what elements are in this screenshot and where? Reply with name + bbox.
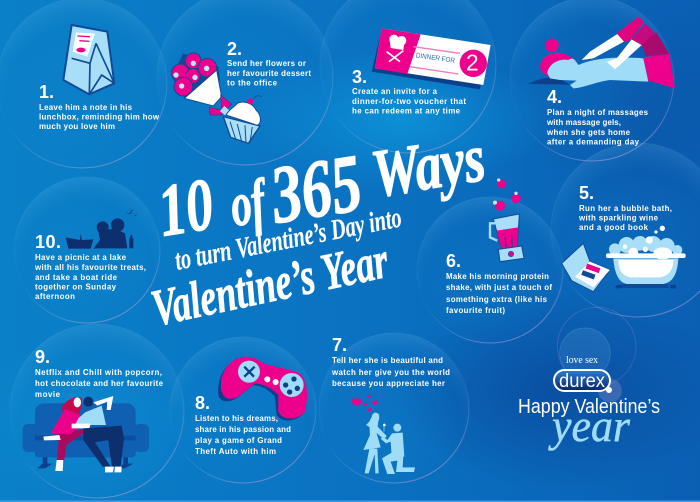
text: item 6: 6. <box>446 251 461 271</box>
text: item 7: Tell her she is beautiful and <box>332 356 443 365</box>
icon: blender and strawberries <box>490 178 524 262</box>
text: item 1: Leave him a note in his <box>39 103 133 112</box>
text: item 7 <box>331 335 450 388</box>
item 10: picnic <box>34 209 146 301</box>
text: item 5 <box>578 183 672 232</box>
durex logo lockup <box>518 307 660 451</box>
item 6: protein shake <box>446 178 552 315</box>
icon: massage illustration <box>528 17 675 88</box>
text: item 2: Send her flowers or <box>227 59 306 68</box>
text: item 1: 1. <box>39 82 54 102</box>
title: Valentine’s Year <box>147 232 394 338</box>
text: item 4: Plan a night of massages <box>547 108 649 117</box>
text: item 10: 10. <box>35 232 61 252</box>
title: 365 <box>264 137 368 241</box>
text: item 7: watch her give you the world <box>331 368 450 377</box>
text: item 5: and a good book <box>579 223 649 232</box>
durex pill: durex <box>559 371 605 392</box>
item 4: massage <box>528 17 675 146</box>
text: item 1: lunchbox, reminding him how <box>39 112 160 122</box>
text: item 9: movie <box>35 390 61 399</box>
icon: dinner for 2 ticket <box>372 28 491 89</box>
text: item 9: 9. <box>35 347 50 367</box>
text: item 6 <box>446 251 552 315</box>
text: item 3 <box>352 67 466 116</box>
text: item 8 <box>195 393 291 456</box>
text: item 9: hot chocolate and her favourite <box>35 379 164 388</box>
text: item 1: much you love him <box>39 122 115 131</box>
icon: lunch bag <box>63 25 114 94</box>
text: item 8: share in his passion and <box>195 425 291 434</box>
icon: couple on sofa <box>23 396 149 472</box>
title <box>147 119 490 338</box>
icon: bouquet and cupcake <box>172 53 262 143</box>
text: item 5: with sparkling wine <box>578 214 659 222</box>
text: item 7: because you appreciate her <box>332 379 445 388</box>
item 9: netflix and chill <box>23 347 164 472</box>
text: item 3: Create an invite for a <box>352 87 438 96</box>
text: item 5: Run her a bubble bath, <box>579 204 672 213</box>
text: item 8: 8. <box>195 393 210 413</box>
item 3: dinner voucher <box>352 28 491 116</box>
text: item 2: her favourite dessert <box>227 69 311 78</box>
text: item 10: together on Sunday <box>35 282 117 292</box>
icon: dinner for 2 ticket: 2 <box>466 50 479 76</box>
text: item 6: shake, with just a touch of <box>446 283 552 292</box>
bubble above logo <box>557 307 636 403</box>
text: item 8: Theft Auto with him <box>195 447 276 456</box>
text: item 4: when she gets home <box>546 128 631 137</box>
text: item 2 <box>227 39 311 88</box>
text: item 6: something extra (like his <box>446 295 548 304</box>
item 1: lunchbox note <box>39 25 160 131</box>
text: item 2: 2. <box>227 39 242 59</box>
item 5: bubble bath <box>562 183 686 292</box>
text: item 8: play a game of Grand <box>195 436 282 445</box>
title: 10 <box>153 163 219 253</box>
icon: game controller <box>218 357 307 420</box>
text: item 5: 5. <box>579 183 594 203</box>
text: item 10: Have a picnic at a lake <box>35 253 127 262</box>
text: item 9 <box>35 347 164 399</box>
text: item 8: Listen to his dreams, <box>195 414 278 423</box>
item 8: game <box>195 357 307 456</box>
title: to turn Valentine’s Day into <box>172 202 404 277</box>
item 7: beautiful <box>331 335 450 474</box>
item 2: flowers and dessert <box>172 39 311 143</box>
happy valentine's: Happy Valentine’s <box>518 396 660 418</box>
text: item 4: with massage gels, <box>546 118 621 127</box>
text: item 6: favourite fruit) <box>446 306 505 315</box>
text: item 3: he can redeem at any time <box>352 106 461 116</box>
text: item 7: 7. <box>332 335 347 355</box>
icon: picnic silhouette <box>66 209 138 249</box>
text: item 4 <box>546 87 649 146</box>
text: item 1 <box>39 82 160 131</box>
text: item 10 <box>34 232 146 301</box>
text: item 10: with all his favourite treats, <box>34 263 146 272</box>
text: item 2: to the office <box>227 78 278 88</box>
text: item 9: Netflix and Chill with popcorn, <box>35 368 162 377</box>
year: year <box>548 400 631 451</box>
title: of <box>226 167 273 240</box>
text: item 10: and take a boat ride <box>35 273 118 282</box>
text: item 6: Make his morning protein <box>446 272 549 281</box>
icon: bath and book <box>562 226 686 292</box>
icon: dinner for 2 ticket: DINNER FOR <box>415 52 455 65</box>
text: item 3: 3. <box>352 67 367 87</box>
text: item 3: dinner-for-two voucher that <box>352 97 466 106</box>
text: item 4: 4. <box>547 87 562 107</box>
icon: proposal silhouette <box>363 413 415 474</box>
title: Ways <box>366 119 490 212</box>
text: item 4: after a demanding day <box>547 138 640 146</box>
text: item 10: afternoon <box>35 292 75 301</box>
love sex tagline: love sex <box>566 355 598 366</box>
icon: hearts <box>352 395 378 412</box>
